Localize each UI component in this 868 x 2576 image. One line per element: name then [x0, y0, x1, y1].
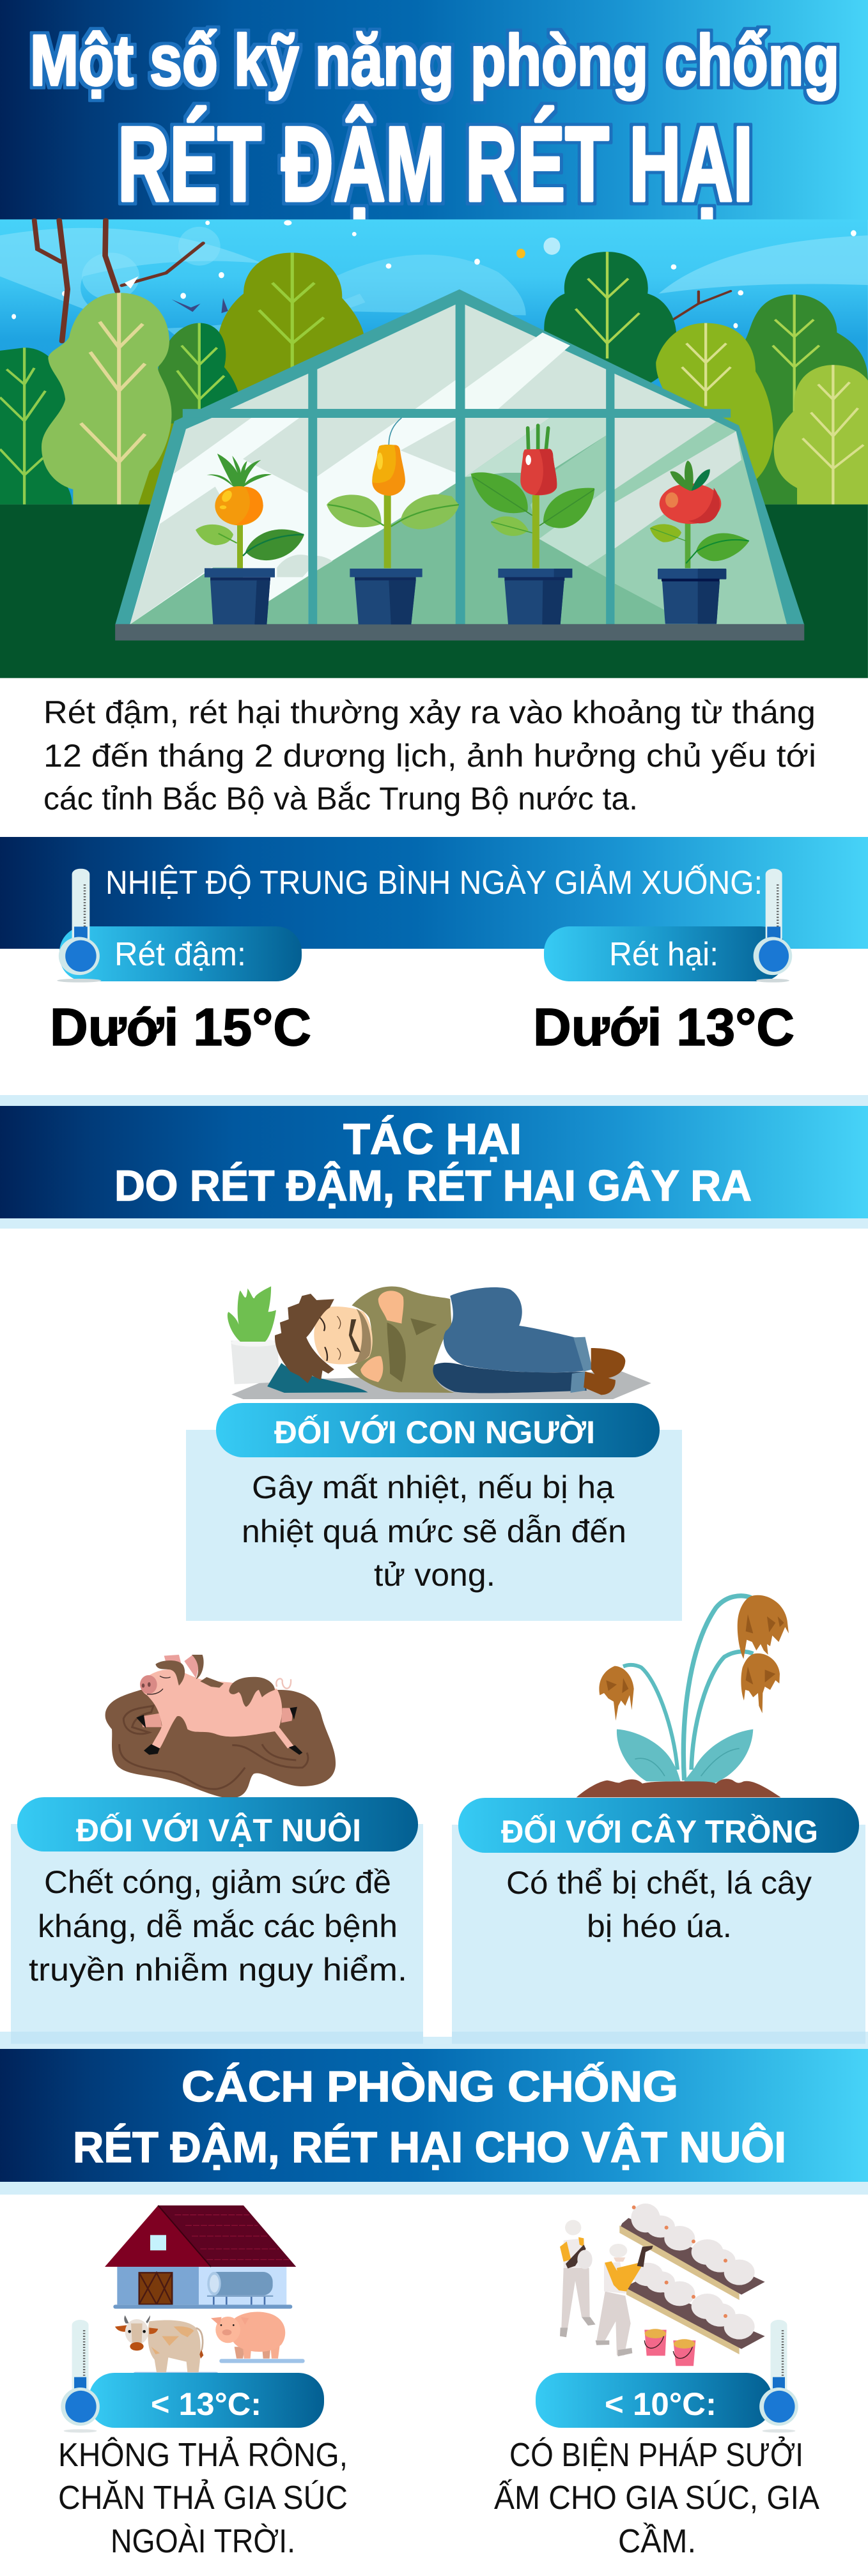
- intro text: các tỉnh Bắc Bộ và Bắc Trung Bộ nước ta.: [43, 781, 638, 816]
- plant: red pepper: [471, 425, 594, 624]
- advice right: CẦM.: [618, 2522, 696, 2560]
- section heading: cách phòng chống: CÁCH PHÒNG CHỐNG: [182, 2062, 678, 2111]
- icon: thermometer lower left: [61, 2320, 100, 2433]
- panel: đối với vật nuôi: [11, 1797, 423, 2044]
- pill: rét hại: Rét hại:: [609, 936, 718, 973]
- panel: đối với cây trồng: [452, 1798, 865, 2044]
- pill: rét hại: [544, 926, 786, 981]
- label pill: ĐỐI VỚI CON NGƯỜI: [274, 1414, 595, 1450]
- description: Gây mất nhiệt, nếu bị hạ: [252, 1469, 614, 1505]
- callout: dưới 10 độ: < 10°C:: [605, 2386, 717, 2422]
- label pill: [216, 1403, 660, 1457]
- advice left: KHÔNG THẢ RÔNG,: [58, 2436, 348, 2474]
- callout: dưới 13 độ: < 13°C:: [151, 2386, 261, 2422]
- label pill: ĐỐI VỚI VẬT NUÔI: [76, 1812, 361, 1848]
- greenhouse bars and base: [115, 298, 804, 641]
- illustration: wilted plant: [577, 1595, 789, 1797]
- glass panels right: [465, 418, 787, 624]
- plant: orange: [196, 454, 304, 624]
- advice right: [494, 2436, 819, 2560]
- illustration: sleeping man: [228, 1286, 651, 1399]
- section heading: tác hại: DO RÉT ĐẬM, RÉT HẠI GÂY RA: [114, 1161, 752, 1210]
- plant: tomato: [650, 461, 749, 624]
- ground: [0, 505, 868, 678]
- description: [242, 1469, 626, 1593]
- trees: [0, 252, 868, 505]
- illustration: pig in mud: [105, 1655, 336, 1798]
- section heading: cách phòng chống: RÉT ĐẬM, RÉT HẠI CHO VẬT NUÔI: [73, 2122, 786, 2172]
- description: [506, 1865, 812, 1944]
- pill: rét đậm: Rét đậm:: [114, 936, 246, 973]
- description: kháng, dễ mắc các bệnh: [38, 1908, 398, 1944]
- plant: yellow: [327, 418, 459, 624]
- advice left: CHĂN THẢ GIA SÚC: [58, 2479, 348, 2517]
- callout: dưới 10 độ: [536, 2373, 772, 2428]
- pill: rét đậm: [59, 926, 302, 981]
- intro text: Rét đậm, rét hại thường xảy ra vào khoảng từ tháng: [43, 694, 816, 730]
- panel: đối với con người: [186, 1403, 682, 1621]
- callout: dưới 13 độ: [89, 2373, 324, 2428]
- description: [29, 1864, 407, 1988]
- section heading: tác hại: [0, 1095, 868, 1229]
- description: nhiệt quá mức sẽ dẫn đến: [242, 1514, 626, 1549]
- header band: [0, 0, 868, 224]
- greenhouse frame and upper glass: [115, 289, 804, 625]
- advice right: ẤM CHO GIA SÚC, GIA: [494, 2479, 819, 2517]
- temperature heading: NHIỆT ĐỘ TRUNG BÌNH NGÀY GIẢM XUỐNG:: [105, 864, 763, 901]
- description: Chết cóng, giảm sức đề: [44, 1864, 391, 1900]
- glass panels left: [130, 418, 456, 624]
- intro text: 12 đến tháng 2 dương lịch, ảnh hưởng chủ yếu tới: [43, 738, 816, 774]
- icon: thermometer lower right: [759, 2320, 798, 2433]
- label pill: [458, 1798, 859, 1853]
- intro text: [43, 694, 816, 816]
- value: dưới 15: Dưới 15°C: [50, 997, 311, 1057]
- greenhouse scene illustration: [0, 219, 868, 678]
- advice left: NGOÀI TRỜI.: [111, 2523, 295, 2560]
- label pill: [17, 1797, 418, 1851]
- label pill: ĐỐI VỚI CÂY TRỒNG: [501, 1813, 818, 1850]
- section heading: cách phòng chống: [0, 2032, 868, 2195]
- description: bị héo úa.: [587, 1908, 732, 1944]
- description: Có thể bị chết, lá cây: [506, 1865, 812, 1901]
- advice right: CÓ BIỆN PHÁP SƯỞI: [509, 2436, 803, 2474]
- section heading: tác hại: TÁC HẠI: [343, 1115, 522, 1163]
- description: truyền nhiễm nguy hiểm.: [29, 1952, 407, 1988]
- value: dưới 13: Dưới 13°C: [533, 997, 794, 1057]
- illustration: poultry farm workers: [560, 2204, 765, 2366]
- description: tử vong.: [374, 1557, 495, 1593]
- icon: thermometer right: [754, 869, 792, 983]
- advice left: [58, 2436, 348, 2560]
- icon: thermometer left: [57, 869, 101, 983]
- illustration: barn and animals: [105, 2205, 305, 2376]
- panel: temperature thresholds: [0, 837, 868, 1057]
